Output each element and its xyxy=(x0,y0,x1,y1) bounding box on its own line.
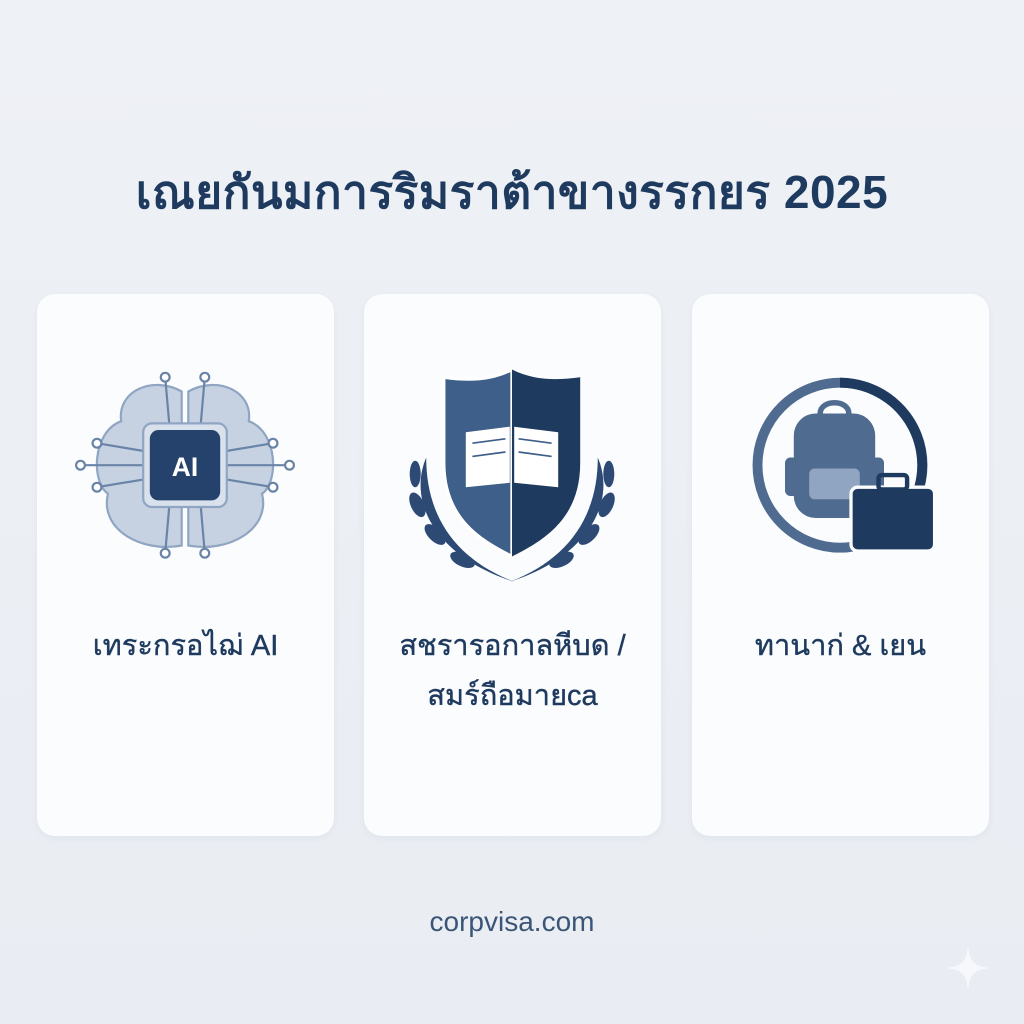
label: ทานาก่ & เยน xyxy=(755,630,926,662)
icon: shield with book and laurels xyxy=(409,370,615,582)
icon: sparkle xyxy=(948,948,988,988)
label: สมร์ถือมายca xyxy=(427,680,598,712)
title: เณยกันมการริมราต้าขางรรกยร 2025 xyxy=(136,166,888,218)
panel: AI xyxy=(37,294,334,836)
icon: AI brain chip: AI xyxy=(172,452,198,482)
footer: corpvisa.com xyxy=(430,906,594,937)
label xyxy=(399,630,626,712)
icon: AI brain chip xyxy=(75,372,295,559)
panel: travel & work xyxy=(692,294,989,836)
label: เทระกรอไฌ่ AI xyxy=(93,630,278,662)
panel: education xyxy=(364,294,661,836)
icon: clock backpack briefcase xyxy=(752,378,933,553)
label: สชรารอกาลหีบด / xyxy=(399,630,626,662)
